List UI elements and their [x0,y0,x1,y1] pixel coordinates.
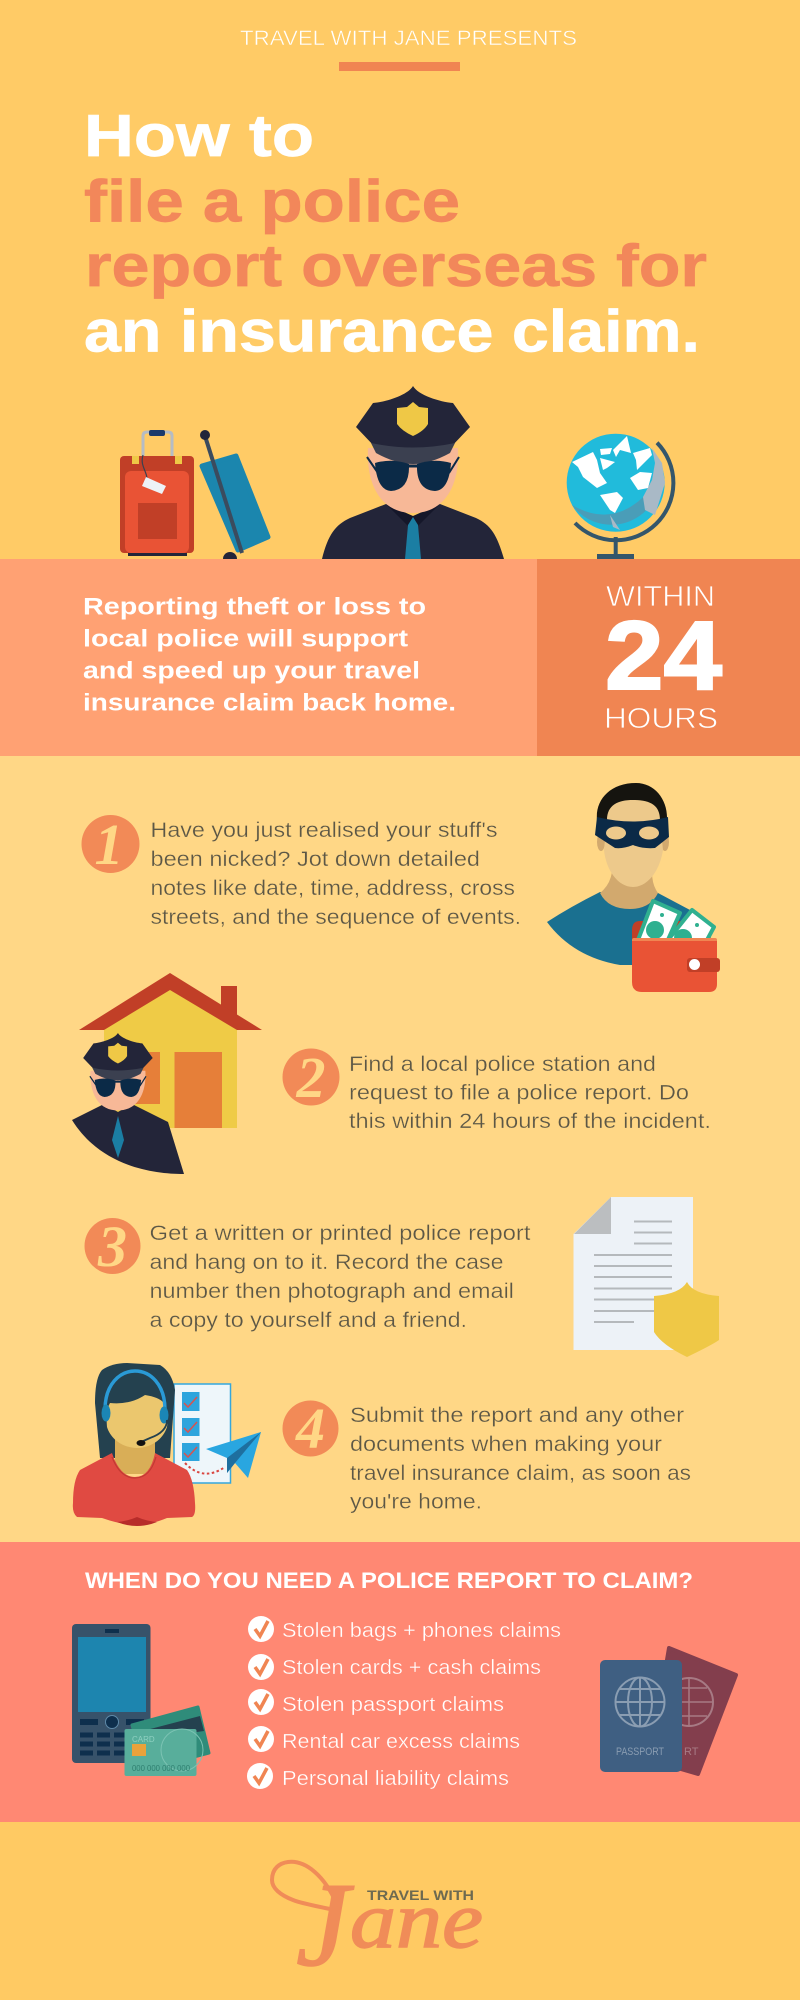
panel: within 24 hours: WITHIN [606,581,715,613]
icon: passports [600,1648,736,1774]
officer body [322,504,504,559]
check item: bags and phones: Stolen bags + phones claims [282,1620,561,1642]
step 4 text: Submit the report and any other [350,1404,684,1427]
section heading: WHEN DO YOU NEED A POLICE REPORT TO CLAIM? [85,1568,693,1593]
icon: police officer [322,386,504,559]
red passport: RT [684,1746,699,1758]
step 4 [73,1363,691,1526]
claims checklist [247,1616,561,1790]
globe arc and stand [575,443,673,559]
step 4 text: documents when making your [350,1433,662,1456]
icon: blue suitcase [200,430,268,559]
step 1 number badge [82,812,140,877]
check item: personal liability [247,1763,509,1790]
panel: footer logo [0,1822,800,2000]
title: an insurance claim. [84,298,700,364]
banner text: local police will support [83,626,408,652]
thief [547,783,690,965]
step 2 text [349,1053,711,1133]
step 1 text: Have you just realised your stuff's [150,819,498,842]
step 2 number badge [282,1045,340,1110]
step 3 text: a copy to yourself and a friend. [150,1309,467,1332]
front card: CARD [132,1735,155,1744]
eyebrow: travel with jane presents: TRAVEL WITH JANE PRESENTS [240,26,577,50]
step 3 text: number then photograph and email [150,1280,514,1303]
step 2 text: Find a local police station and [349,1053,656,1076]
panel: within 24 hours: 24 [605,601,722,710]
check item: passport: Stolen passport claims [282,1694,504,1716]
officer body [72,1104,184,1174]
step 3 number badge: 3 [97,1214,127,1279]
officer head [356,386,470,513]
panel: reporting banner [0,559,800,756]
step 3 text: and hang on to it. Record the case [150,1251,503,1274]
icon: globe [567,434,673,559]
police station [79,973,262,1128]
check item: personal liability: Personal liability claims [282,1768,509,1790]
step 1 text: streets, and the sequence of events. [150,906,521,929]
agent [73,1363,195,1526]
step 3 text [150,1222,531,1332]
step 4 number badge: 4 [295,1396,325,1461]
step 2 number badge: 2 [296,1045,326,1110]
check item: cards and cash: Stolen cards + cash claims [282,1657,541,1679]
panel: header [0,0,800,560]
step 2 text: this within 24 hours of the incident. [349,1110,711,1133]
step 3 [84,1197,719,1357]
panel: when do you need a police report [0,1542,800,1822]
icon: call centre agent with checklist [73,1363,261,1526]
title: file a police [84,168,460,234]
step 4 text: you're home. [350,1490,482,1514]
banner text: and speed up your travel [83,658,420,684]
icon: report document with shield [574,1197,719,1357]
front card: 000 000 000 000 [132,1764,191,1773]
check item: cards and cash [248,1654,541,1680]
blue passport: PASSPORT [616,1746,664,1758]
panel: steps background [0,756,800,1542]
step 4 text: travel insurance claim, as soon as [350,1462,691,1485]
icon: phone and cards [72,1624,209,1776]
icon: red suitcase [120,430,194,556]
step 2 [72,973,711,1174]
step 1 text [150,819,521,929]
back card [132,1707,209,1770]
banner text: insurance claim back home. [83,690,456,716]
step 1 [82,783,720,992]
icon: police station with officer [72,973,262,1174]
banner text: Reporting theft or loss to [83,594,426,620]
logo: travel with jane: J [296,1858,354,1991]
step 2 text: request to file a police report. Do [349,1082,689,1104]
check item: bags and phones [248,1616,561,1642]
check item: passport [248,1689,504,1716]
check item: rental car [248,1726,520,1753]
title: How to [84,103,314,169]
step 1 text: been nicked? Jot down detailed [150,848,480,871]
step 3 number badge [84,1214,140,1279]
phone [72,1624,150,1763]
front card [124,1729,203,1776]
panel: within 24 hours [537,559,800,756]
continents [572,436,652,513]
panel: within 24 hours: HOURS [604,703,718,735]
banner text [83,594,456,716]
title: report overseas for [85,233,707,299]
paper plane [206,1432,261,1478]
logo: travel with jane [272,1858,483,1991]
logo: travel with jane: TRAVEL WITH [367,1887,474,1903]
step 3 text: Get a written or printed police report [150,1222,531,1245]
wallet with cash [632,901,720,992]
icon: thief with wallet [547,783,720,992]
officer head [83,1033,153,1110]
accent bar [339,62,460,71]
globe dark side [643,448,665,515]
step 4 number badge [282,1396,338,1461]
logo: travel with jane: ane [350,1877,483,1965]
check item: rental car: Rental car excess claims [282,1731,520,1753]
step 1 text: notes like date, time, address, cross [150,877,515,900]
step 4 text [350,1404,691,1514]
title [84,103,707,364]
step 1 number badge: 1 [94,812,124,877]
checklist [174,1384,230,1483]
